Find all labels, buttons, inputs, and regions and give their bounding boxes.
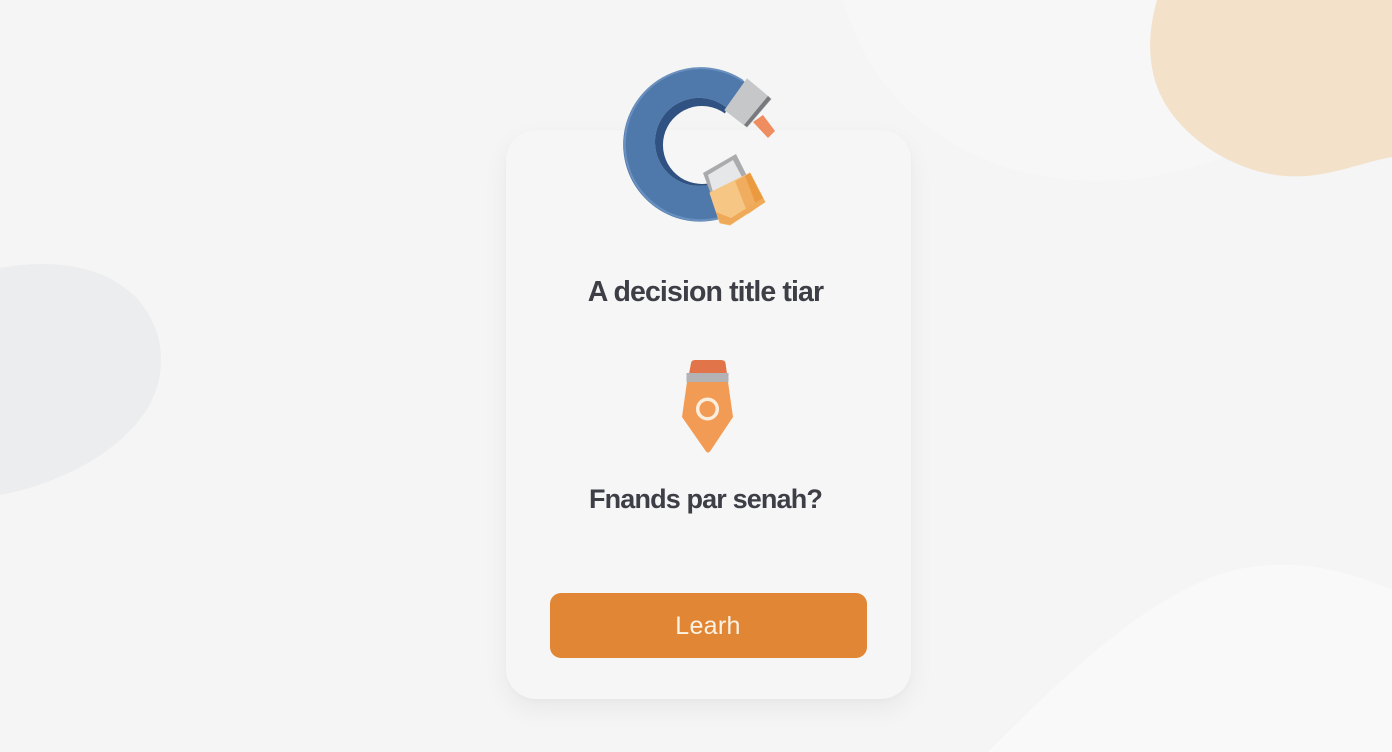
orange cap xyxy=(710,173,765,225)
magnet inner shadow xyxy=(655,98,727,186)
button xyxy=(550,593,866,658)
nib body xyxy=(682,382,733,452)
blob: pale white bottom right xyxy=(988,565,1392,752)
heading: question: Fnands par senah? xyxy=(589,484,822,514)
button: Learh xyxy=(675,612,741,640)
blob: grey left xyxy=(0,264,161,495)
grey pole top xyxy=(725,79,771,127)
nib cap xyxy=(689,360,727,374)
nib collar xyxy=(686,373,728,382)
heading: decision title: A decision title tiar xyxy=(588,276,823,308)
blob: pale white top right xyxy=(843,0,1392,181)
nib ring xyxy=(698,399,717,419)
orange stub xyxy=(753,115,775,138)
magnet body xyxy=(623,68,745,222)
card panel xyxy=(506,130,911,699)
blob: peach top right xyxy=(1150,0,1392,176)
magnet outer highlight xyxy=(625,68,743,220)
grey pole bottom xyxy=(703,154,748,197)
